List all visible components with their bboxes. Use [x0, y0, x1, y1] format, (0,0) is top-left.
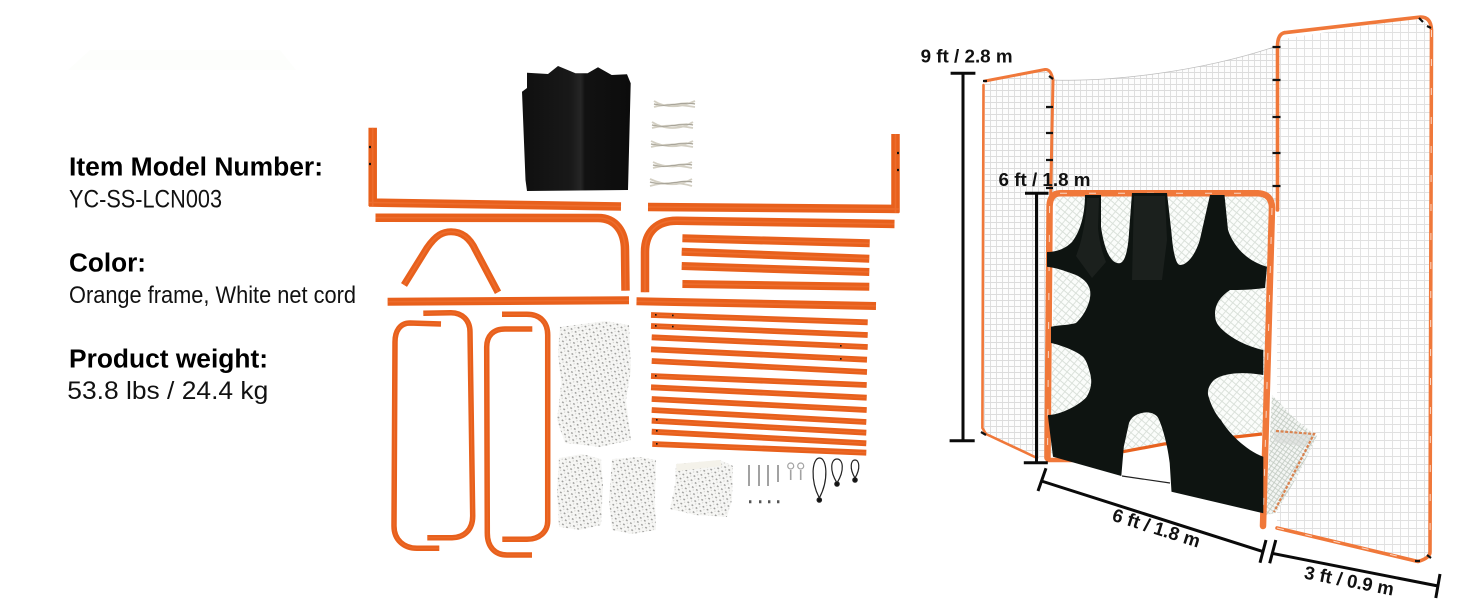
curved tube left [376, 218, 626, 291]
dimension: overall height: 9 ft / 2.8 m [921, 46, 1013, 66]
target sheet highlights [1076, 196, 1167, 280]
arched tube [404, 232, 498, 292]
label: product weight: Product weight: [69, 346, 268, 374]
spare nets [557, 321, 733, 534]
dimension: goal width: 6 ft / 1.8 m [1110, 504, 1203, 551]
curved tube right [645, 221, 894, 292]
label: item model number: Item Model Number: [69, 154, 323, 182]
product specifications [67, 154, 356, 405]
straight tubes upper [388, 238, 876, 306]
goal back base frame [1123, 434, 1262, 452]
left side panel [981, 69, 1053, 458]
target bottom cord [1122, 476, 1170, 483]
cord bundles [650, 101, 695, 186]
right corner tube [648, 134, 899, 213]
goal net behind target [1050, 195, 1270, 456]
black target sheet folded [522, 66, 631, 191]
back net [1053, 46, 1277, 200]
goal frame bottom [1048, 458, 1072, 462]
dimension: goal height: 6 ft / 1.8 m [998, 169, 1090, 190]
goal net pocket [1266, 395, 1317, 515]
parts layout [369, 66, 899, 555]
U-shaped tubes [394, 313, 548, 555]
goal frame [1048, 193, 1272, 526]
faint background smudge [68, 50, 296, 70]
left corner tube [369, 128, 621, 206]
hardware: bolts, eye bolts, nuts [749, 463, 804, 502]
dimension: overall height [921, 46, 1013, 441]
value: product weight: 53.8 lbs / 24.4 kg [67, 377, 268, 405]
straight tubes lower [651, 314, 868, 453]
dimension: side panel width: 3 ft / 0.9 m [1303, 562, 1396, 600]
right side panel [1272, 17, 1432, 562]
value: model number: YC-SS-LCN003 [69, 186, 222, 214]
dimension: side panel width [1270, 540, 1440, 600]
black target sheet [1047, 193, 1267, 513]
dimension: goal width [1038, 468, 1266, 563]
label: color: Color: [69, 250, 146, 278]
bungee loops [813, 458, 859, 502]
value: color: Orange frame, White net cord [69, 282, 356, 309]
assembled goal with dimensions [921, 17, 1440, 600]
dimension: goal height [998, 169, 1090, 463]
